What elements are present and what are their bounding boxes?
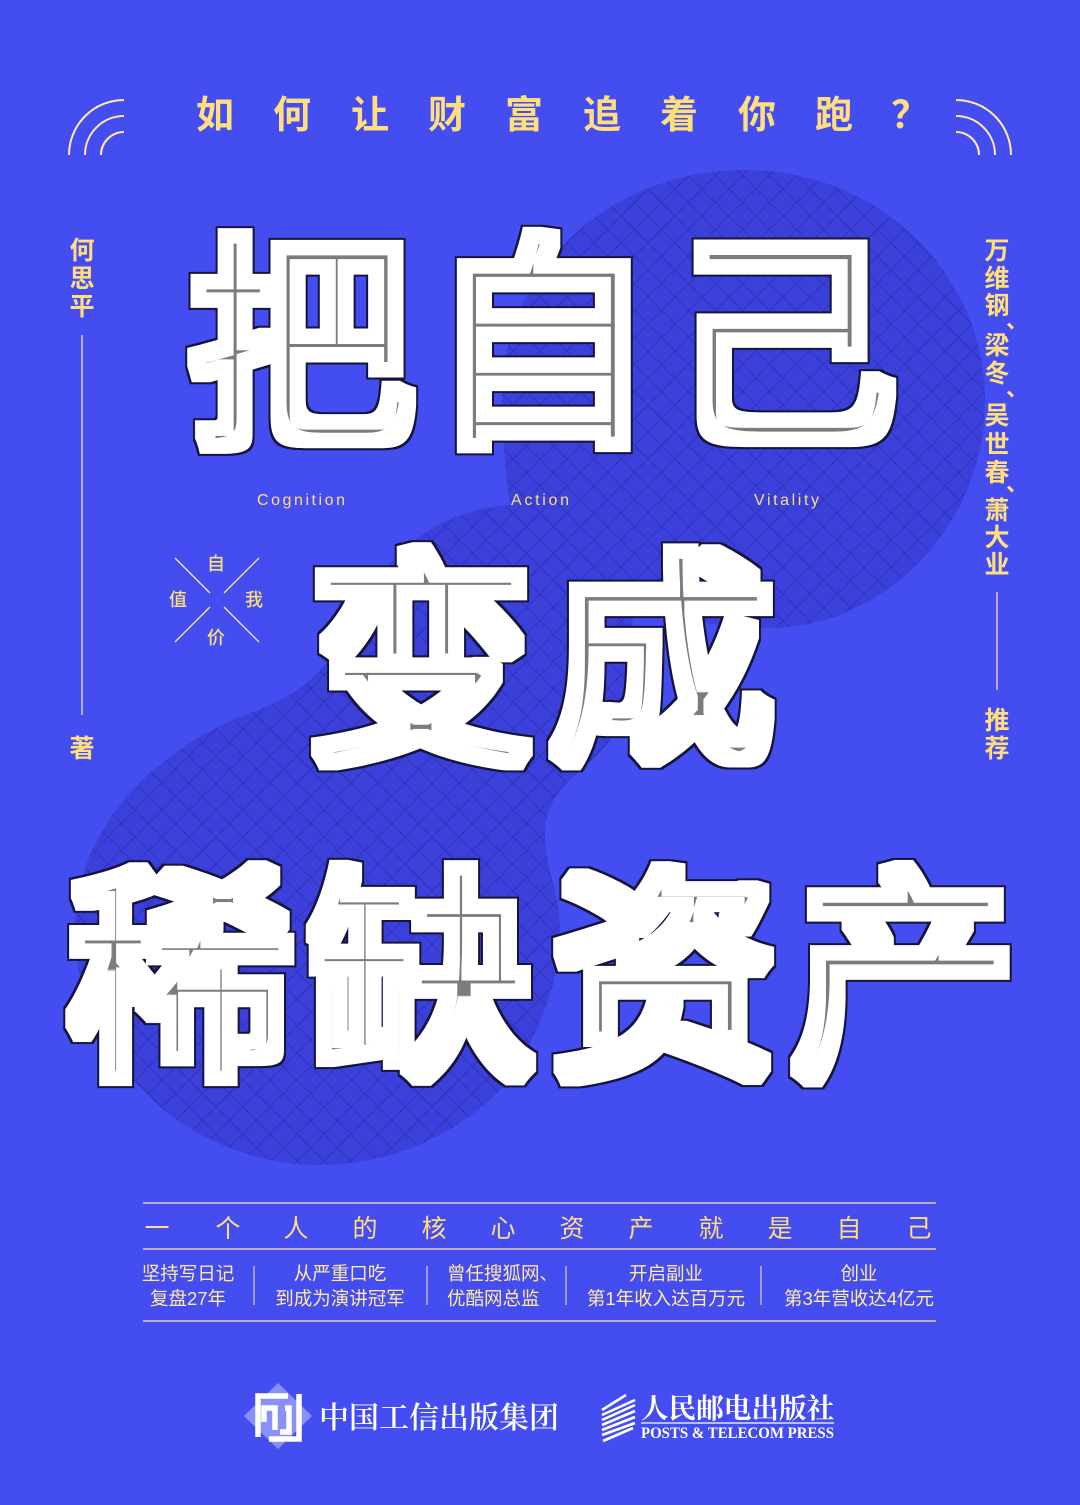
title: question line: 富 <box>505 95 543 137</box>
tagline band: 心 <box>490 1215 516 1243</box>
tagline band: 产 <box>628 1215 654 1243</box>
achievements row: 从严重口吃 <box>294 1263 386 1284</box>
self value cross graphic: 价 <box>207 628 225 648</box>
recommenders column: 梁 <box>984 332 1010 360</box>
recommenders column: 大 <box>984 524 1010 552</box>
logo: Posts and Telecom Press: 人民邮电出版社 <box>641 1386 834 1426</box>
icon: right arcs <box>956 100 1011 155</box>
recommenders column: 钢 <box>984 292 1010 320</box>
self value cross graphic <box>169 554 263 648</box>
self value cross graphic: 自 <box>207 554 225 574</box>
icon: left arcs <box>69 100 124 155</box>
title: question line: 财 <box>428 95 466 137</box>
title: question line: 如 <box>196 95 234 137</box>
big title line 2: 变 <box>308 482 534 809</box>
big title line 3 <box>68 798 1017 1125</box>
english labels <box>257 492 819 509</box>
author column: 著 <box>69 735 95 763</box>
tagline band: 人 <box>283 1215 309 1243</box>
achievements row: 复盘27年 <box>150 1288 226 1309</box>
recommenders column: 荐 <box>984 735 1010 763</box>
achievements row: 开启副业 <box>629 1263 703 1284</box>
logo: China Industry group: 中国工信出版集团 <box>319 1393 559 1437</box>
title: question line: 跑 <box>815 95 853 137</box>
tagline band: 是 <box>767 1215 793 1243</box>
big title line 3: 资 <box>551 798 777 1125</box>
hatched blob background <box>75 170 985 1165</box>
recommenders column: 万 <box>984 237 1010 265</box>
self value cross graphic: 我 <box>245 590 263 610</box>
recommenders column: 吴 <box>984 402 1010 430</box>
title: question line: 何 <box>273 95 311 137</box>
big title line 1: 把 <box>188 166 414 493</box>
title: question line: 让 <box>351 95 389 137</box>
achievements row: 创业 <box>840 1263 878 1284</box>
author column: 思 <box>69 265 95 293</box>
tagline band: 一 <box>144 1215 170 1243</box>
tagline band <box>143 1203 936 1321</box>
english labels: Action <box>511 492 569 509</box>
big title line 2: 成 <box>549 481 775 808</box>
tagline band: 就 <box>698 1215 724 1243</box>
title: question line: 着 <box>660 95 698 137</box>
achievements row: 第1年收入达百万元 <box>587 1288 745 1309</box>
big title line 3: 产 <box>791 798 1017 1125</box>
achievements row: 优酷网总监 <box>447 1288 540 1309</box>
author column: 平 <box>69 293 95 321</box>
tagline band: 己 <box>906 1215 932 1243</box>
recommenders column: 维 <box>984 265 1010 293</box>
recommenders column: 业 <box>984 551 1010 579</box>
author column <box>69 237 95 763</box>
recommenders column: 推 <box>984 707 1010 735</box>
big title line 1: 自 <box>429 165 655 492</box>
big title line 2 <box>308 481 775 809</box>
title: question line <box>196 95 929 137</box>
big title line 1 <box>188 164 897 493</box>
logo: China Industry group <box>244 1383 559 1449</box>
achievements row: 坚持写日记 <box>142 1263 234 1284</box>
english labels: Vitality <box>754 492 819 509</box>
recommenders column: 春 <box>984 459 1010 487</box>
achievements row <box>142 1263 934 1309</box>
title: question line: ？ <box>891 95 929 137</box>
recommenders column: 、 <box>1006 471 1028 496</box>
self value cross graphic: 值 <box>169 590 187 610</box>
recommenders column: 萧 <box>984 497 1010 525</box>
english labels: Cognition <box>257 492 345 509</box>
achievements row: 到成为演讲冠军 <box>275 1288 405 1309</box>
recommenders column <box>984 237 1028 763</box>
recommenders column: 世 <box>984 431 1010 459</box>
big title line 1: 己 <box>671 164 897 491</box>
author column: 何 <box>69 237 95 265</box>
tagline band: 自 <box>836 1215 862 1243</box>
recommenders column: 、 <box>1006 376 1028 401</box>
title: question line: 追 <box>583 95 621 137</box>
logo: Posts and Telecom Press: POSTS & TELECOM PRESS <box>641 1425 834 1442</box>
tagline band: 的 <box>352 1215 378 1243</box>
tagline band: 个 <box>215 1215 241 1243</box>
big title line 3: 稀 <box>68 798 294 1125</box>
tagline band: 核 <box>421 1215 447 1243</box>
achievements row: 第3年营收达4亿元 <box>784 1288 934 1309</box>
achievements row: 曾任搜狐网、 <box>447 1263 558 1284</box>
recommenders column: 冬 <box>984 360 1010 388</box>
logo: Posts and Telecom Press <box>602 1386 834 1442</box>
tagline band: 资 <box>559 1215 585 1243</box>
title: question line: 你 <box>738 95 776 137</box>
recommenders column: 、 <box>1006 308 1028 333</box>
big title line 3: 缺 <box>308 798 534 1125</box>
